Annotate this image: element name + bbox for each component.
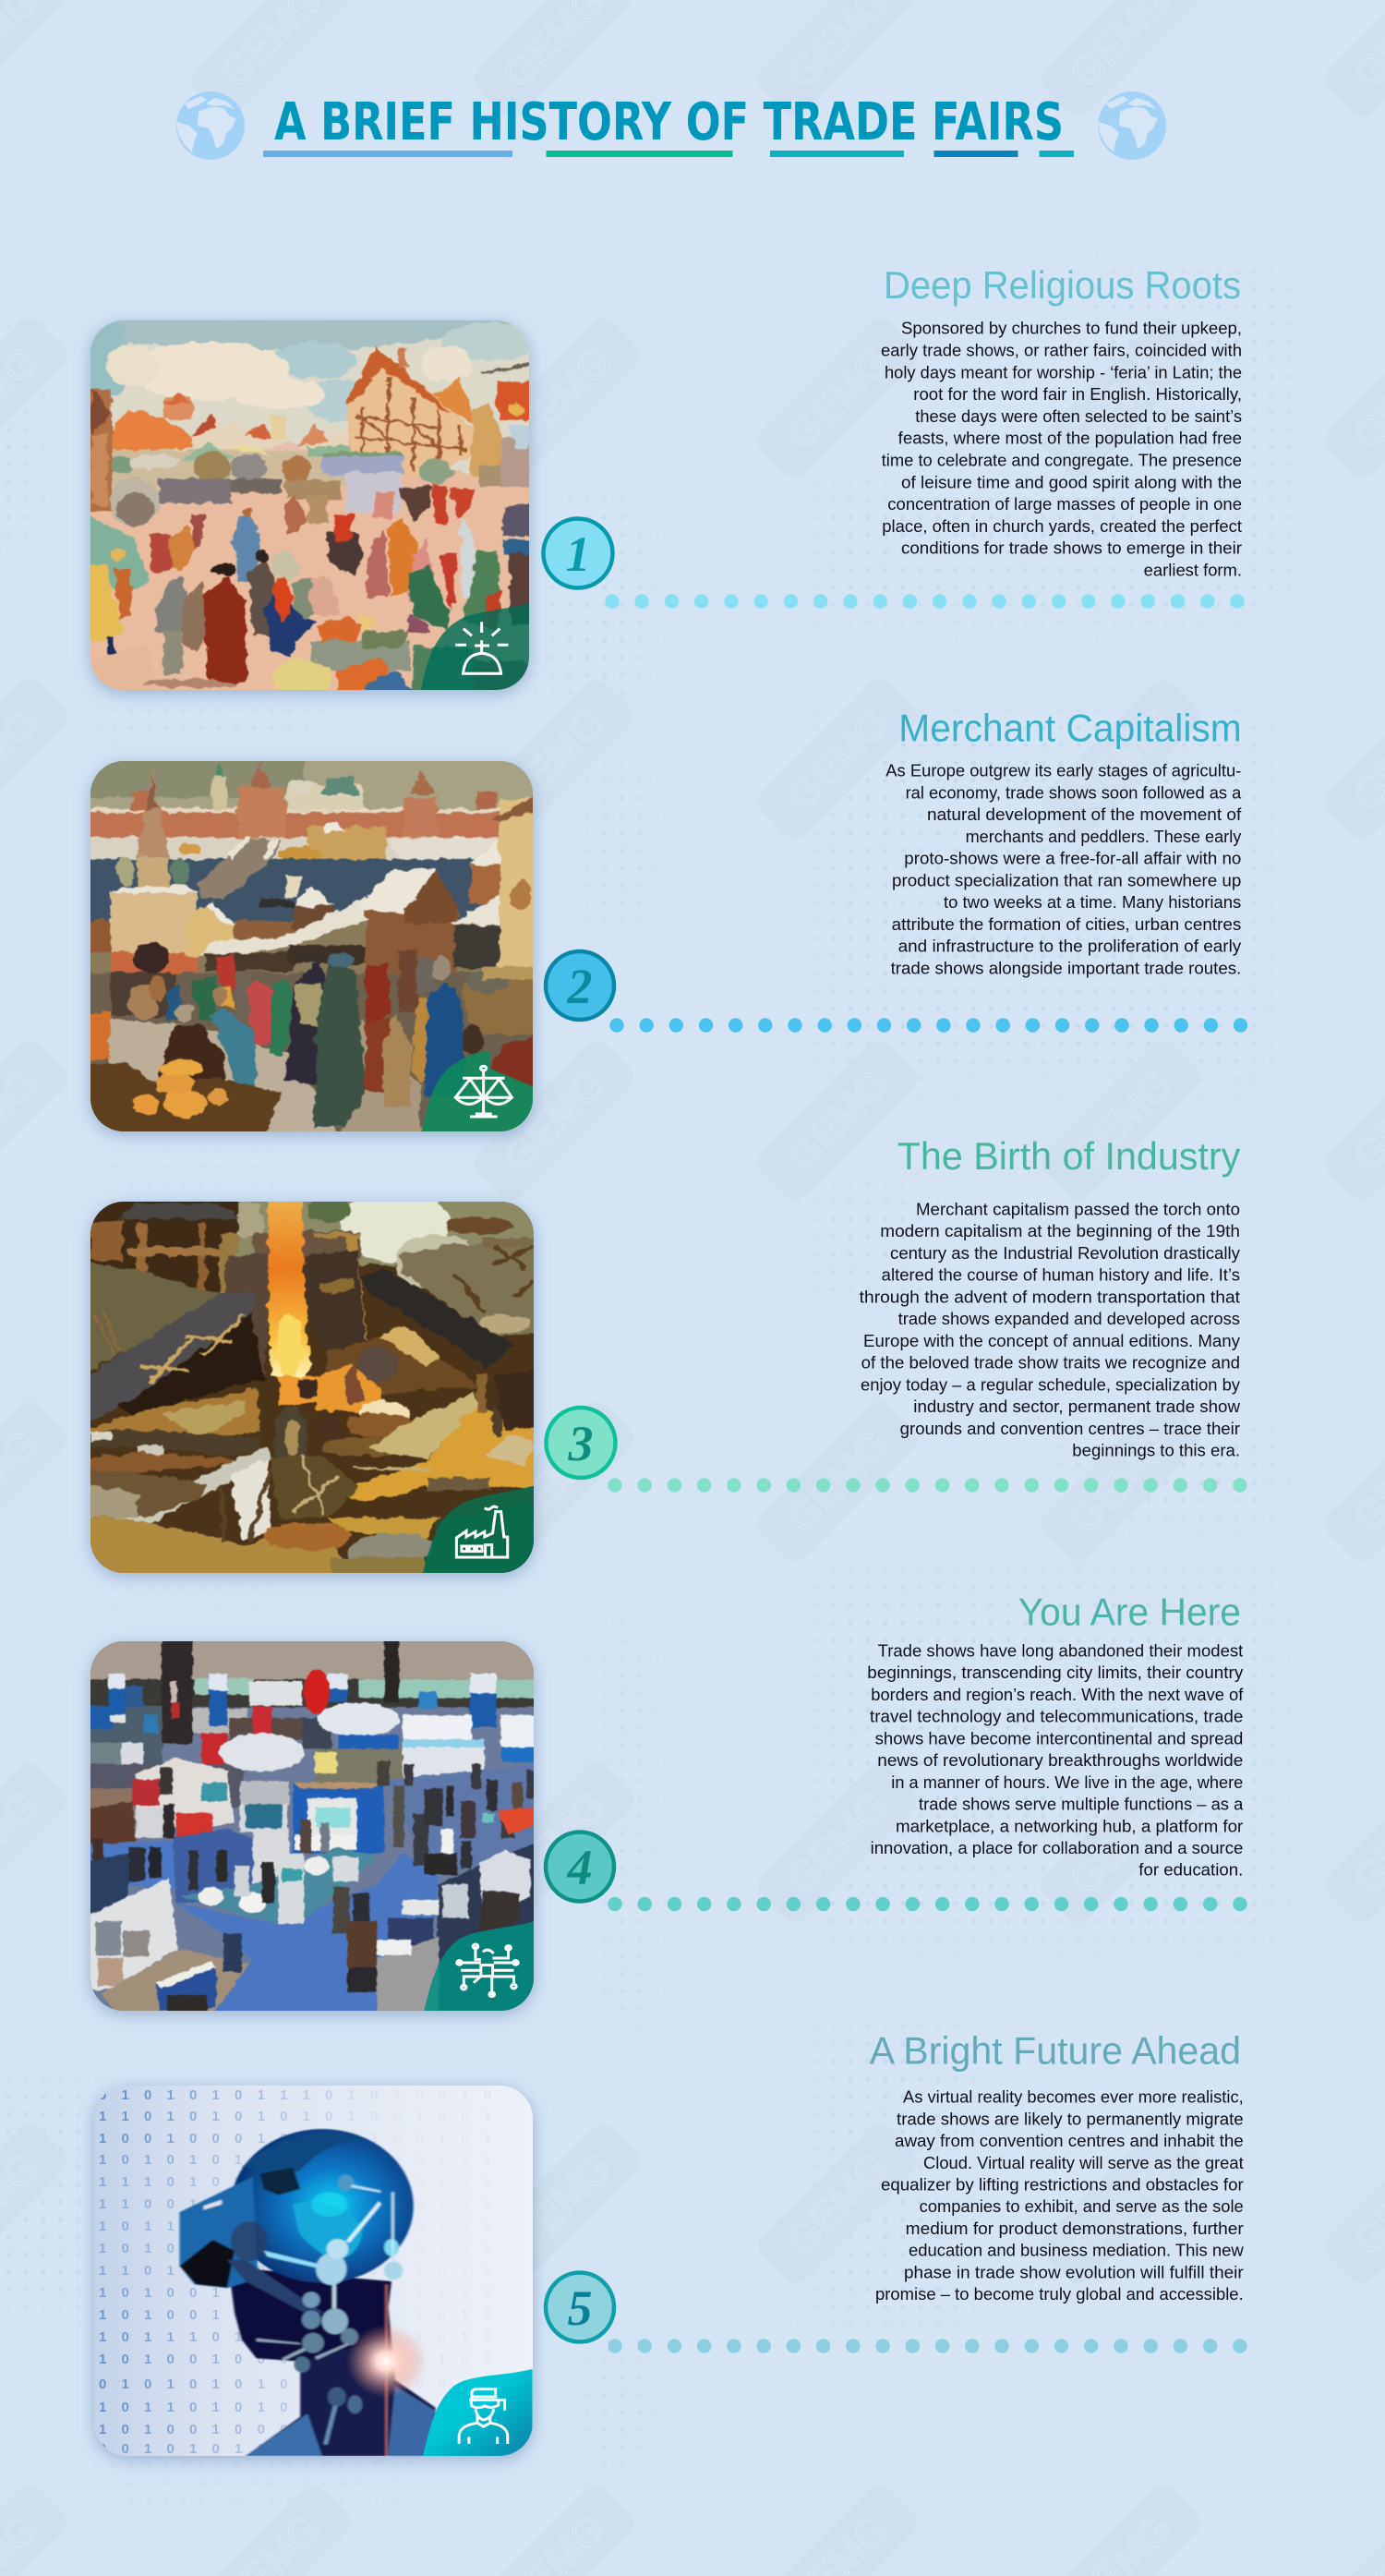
dotted connector 1	[605, 594, 1245, 609]
body text: marketplace, a networking hub, a platform for	[896, 1817, 1243, 1835]
body text: shows have become intercontinental and spread	[875, 1729, 1243, 1748]
heading: Merchant Capitalism	[898, 707, 1242, 750]
number badge 1: 1	[565, 526, 591, 582]
body text: beginnings to this era.	[1072, 1442, 1240, 1460]
binary digit backdrop: 1 0 1 0 0 1 0 0 0 1 0 0 1 0 1 1 0 0	[99, 2285, 497, 2301]
body text: proto-shows were a free-for-all affair with no	[904, 850, 1241, 868]
body text: Europe with the concept of annual editions. Many	[863, 1332, 1240, 1350]
background watermark pattern: GEMG	[1061, 338, 1181, 458]
body text: trade shows are likely to permanently migrate	[897, 2110, 1244, 2128]
heading: The Birth of Industry	[897, 1134, 1240, 1178]
body text: companies to exhibit, and serve as the sole	[920, 2197, 1244, 2216]
body text: Trade shows have long abandoned their modest	[878, 1641, 1243, 1660]
body text: As Europe outgrew its early stages of agricultu-	[885, 762, 1241, 780]
background watermark pattern: GEMG	[494, 1060, 614, 1180]
body text: news of revolutionary breakthroughs worldwide	[877, 1751, 1243, 1770]
number badge 2	[546, 951, 614, 1020]
body text: place, often in church yards, created the perfect	[882, 517, 1242, 536]
body text: promise – to become truly global and accessible.	[875, 2285, 1244, 2304]
binary digit backdrop: 1 0 1 0 0 1 0 0 0 1 0 1 1 1 0 1 0 1	[99, 2422, 497, 2437]
panel: step 2 text	[885, 707, 1242, 977]
body text: altered the course of human history and life. It’s	[882, 1266, 1240, 1285]
title: A BRIEF HISTORY OF TRADE FAIRS	[274, 92, 1064, 152]
number badge 3	[547, 1408, 615, 1478]
background watermark pattern: GEMG	[494, 699, 614, 819]
binary digit backdrop: 1 0 1 0 0 1 0 0 0 1 0 1 1 1 0 1 0 0	[99, 2352, 497, 2367]
body text: education and business mediation. This new	[909, 2242, 1245, 2260]
binary digit backdrop: 1 0 1 1 0 1 0 0 1 0 1 1 0 1 0 1 0 1	[99, 2219, 497, 2234]
icon corner: green badge	[422, 1051, 534, 1133]
binary digit backdrop: 0 0 1 0 1 0 1 0 1 0 1 0 0 1 0 0 1 1	[99, 2441, 497, 2457]
icon corner: green badge	[423, 1485, 535, 1574]
binary digit backdrop: 1 0 1 0 0 1 0 0 0 1 0 1 1 0 1 0 1 0	[99, 2307, 497, 2323]
body text: medium for product demonstrations, further	[906, 2219, 1244, 2238]
number badge 1	[543, 519, 613, 587]
body text	[885, 762, 1242, 977]
body text: holy days meant for worship - ‘feria’ in Latin; the	[885, 363, 1242, 381]
panel: step 5 image, virtual reality head	[94, 2086, 533, 2457]
dotted connector 4	[608, 1897, 1247, 1911]
body text: modern capitalism at the beginning of the 19th	[880, 1222, 1240, 1240]
binary digit backdrop: 1 1 0 0 1 0 0 0 1 0 1 0 1 1 0 1 0 1	[99, 2196, 497, 2212]
icon: circuit head	[457, 1944, 518, 1997]
body text: of leisure time and good spirit along with the	[901, 473, 1242, 491]
background watermark pattern: GEMG	[777, 2144, 897, 2264]
dotted connector 5	[608, 2339, 1247, 2353]
body text: Sponsored by churches to fund their upkeep,	[901, 320, 1242, 338]
dotted connector 3	[608, 1478, 1247, 1493]
body text: earliest form.	[1144, 562, 1242, 580]
background watermark pattern: GEMG	[1061, 699, 1181, 819]
icon corner: teal badge	[423, 2369, 533, 2457]
body text: attribute the formation of cities, urban centres	[892, 915, 1241, 934]
background watermark pattern: GEMG	[1061, 1421, 1181, 1542]
icon: balance scales	[455, 1066, 512, 1117]
binary digit backdrop	[99, 2087, 497, 2457]
icon: church bell	[455, 622, 509, 673]
binary digit backdrop: 1 1 0 1 1 0 1 0 0 1 1 0 1 0 1 0 1 0	[99, 2263, 497, 2279]
background watermark pattern: GEMG	[777, 1783, 897, 1903]
body text: ral economy, trade shows soon followed as a	[906, 783, 1242, 802]
body text: concentration of large masses of people in one	[887, 495, 1242, 514]
panel: step 1 text	[881, 263, 1242, 580]
body text: through the advent of modern transportation that	[860, 1288, 1240, 1306]
body text	[875, 2088, 1245, 2304]
binary digit backdrop: 1 0 0 1 0 0 0 1 0 0 1 0 1 0 0 1 0 1	[99, 2131, 497, 2147]
background watermark pattern: GEMG	[1061, 2144, 1181, 2264]
body text: As virtual reality becomes ever more realistic,	[903, 2088, 1244, 2107]
icon: left globe	[176, 91, 245, 160]
background watermark pattern: GEMG	[1061, 1060, 1181, 1180]
panel: step 4 text	[867, 1590, 1244, 1880]
number badge 3: 3	[567, 1416, 593, 1471]
heading: You Are Here	[1018, 1590, 1241, 1633]
icon corner: green badge	[421, 603, 530, 693]
body text: industry and sector, permanent trade show	[913, 1397, 1241, 1416]
body text: in a manner of hours. We live in the age, where	[891, 1773, 1243, 1792]
dotted connector 2	[609, 1018, 1247, 1033]
icon corner: teal badge	[424, 1921, 535, 2013]
panel: step 3 text	[860, 1134, 1241, 1460]
icon: factory	[456, 1506, 508, 1557]
background watermark pattern: GEMG	[500, 2144, 620, 2264]
body text: product specialization that ran somewhere up	[892, 871, 1241, 889]
icon: right globe	[1098, 91, 1166, 160]
number badge 4	[546, 1832, 614, 1901]
body text: for education.	[1138, 1861, 1243, 1880]
background watermark pattern: GEMG	[1061, 1783, 1181, 1903]
panel: step 5 text	[870, 2028, 1245, 2304]
background watermark pattern: GEMG	[777, 1421, 897, 1542]
body text	[881, 320, 1242, 580]
icon: person with VR headset	[459, 2389, 508, 2444]
body text: away from convention centres and inhabit the	[895, 2132, 1244, 2150]
body text: time to celebrate and congregate. The presence	[882, 451, 1242, 469]
body text: to two weeks at a time. Many historians	[944, 893, 1241, 912]
body text: equalizer by lifting restrictions and obstacles for	[881, 2176, 1244, 2195]
panel: step 4 image, modern trade show floor	[81, 1632, 541, 2020]
body text: these days were often selected to be saint’s	[915, 407, 1242, 426]
background watermark pattern: GEMG	[494, 1783, 614, 1903]
body text: and infrastructure to the proliferation of early	[898, 937, 1241, 956]
background watermark pattern: GEMG	[494, 1421, 614, 1542]
binary digit backdrop: 1 1 1 0 1 0 1 0 1 0 1 0 0 1 0 1 0 0	[99, 2174, 497, 2190]
body text: century as the Industrial Revolution drastically	[890, 1244, 1240, 1263]
binary digit backdrop: 0 1 0 1 0 1 0 1 0 1 0 1 0 1 0 0 1 1	[99, 2376, 497, 2392]
heading: Deep Religious Roots	[884, 263, 1241, 307]
binary digit backdrop: 1 1 0 1 0 1 0 1 0 1 0 1 0 0 1 0 0 1	[99, 2109, 497, 2124]
background watermark pattern: GEMG	[777, 1060, 897, 1180]
number badge 2: 2	[567, 959, 593, 1014]
body text: innovation, a place for collaboration and a source	[871, 1839, 1243, 1857]
body text: travel technology and telecommunications, trade	[870, 1707, 1243, 1725]
body text: trade shows serve multiple functions – as a	[919, 1796, 1244, 1814]
body text: beginnings, transcending city limits, their country	[867, 1663, 1243, 1682]
binary digit backdrop: 1 0 1 1 1 0 1 0 1 0 1 0 1 0 1 0 1 0	[99, 2329, 497, 2345]
body text: trade shows alongside important trade routes.	[891, 959, 1241, 977]
binary digit backdrop: 1 0 1 0 0 0 1 0 1 0 0 1 0 1 0 1 0 0	[99, 2241, 497, 2256]
body text: grounds and convention centres – trace their	[900, 1420, 1240, 1438]
panel: step 2 image, winter trading town	[78, 751, 545, 1138]
body text: trade shows expanded and developed across	[898, 1310, 1240, 1328]
title underline segments	[263, 151, 1074, 157]
number badge 4: 4	[567, 1840, 593, 1895]
body text: conditions for trade shows to emerge in their	[901, 539, 1242, 558]
body text: root for the word fair in English. Historically,	[913, 385, 1242, 404]
body text: borders and region’s reach. With the next wave of	[871, 1686, 1244, 1704]
body text: natural development of the movement of	[927, 805, 1242, 824]
binary digit backdrop: 1 0 1 1 0 1 0 1 0 1 0 1 0 0 1 1 0 1	[99, 2400, 497, 2415]
body text: Cloud. Virtual reality will serve as the great	[923, 2154, 1244, 2172]
heading: A Bright Future Ahead	[870, 2028, 1241, 2072]
background watermark pattern: GEMG	[500, 338, 620, 458]
background watermark pattern: GEMG	[777, 338, 897, 458]
body text: of the beloved trade show traits we recognize and	[861, 1354, 1240, 1373]
panel: step 1 image, medieval market	[78, 311, 545, 699]
body text: early trade shows, or rather fairs, coincided with	[881, 342, 1242, 360]
binary digit backdrop: 0 1 0 1 0 1 0 1 1 1 0 1 0 1 0 0 1 0	[99, 2087, 497, 2103]
body text: feasts, where most of the population had free	[898, 429, 1242, 448]
panel: step 3 image, iron furnace	[78, 1189, 545, 1579]
body text: phase in trade show evolution will fulfill their	[904, 2263, 1244, 2281]
number badge 5: 5	[567, 2280, 593, 2336]
body text	[867, 1641, 1244, 1880]
binary digit backdrop: 1 0 1 0 1 0 1 0 1 0 1 0 1 0 0 1 0 1	[99, 2152, 497, 2168]
header: title with globes and coloured underline	[176, 91, 1166, 160]
body text: enjoy today – a regular schedule, specialization by	[861, 1375, 1240, 1394]
body text: Merchant capitalism passed the torch onto	[916, 1200, 1240, 1218]
background watermark pattern: GEMG	[777, 699, 897, 819]
body text	[860, 1200, 1241, 1460]
number badge 5	[546, 2272, 614, 2342]
body text: merchants and peddlers. These early	[966, 828, 1241, 846]
